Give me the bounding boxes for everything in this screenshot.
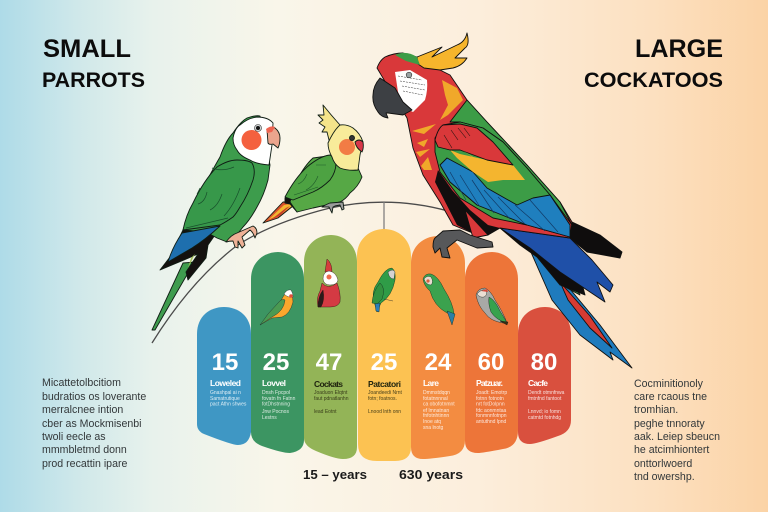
bar: red 80: 80 xyxy=(531,349,557,376)
bar: red 80: catmtd fotnhdg xyxy=(528,415,561,421)
title: small parrots xyxy=(42,35,145,92)
bar: deep orange 60: antuthnd lpnd xyxy=(476,419,507,425)
title: large cockatoos: LARGE xyxy=(635,35,723,63)
black belly shadow xyxy=(435,170,500,235)
bar: green 25: Jnw Pocnos xyxy=(262,409,289,415)
bar: red 80: Lnnvd; io fomn xyxy=(528,409,561,415)
body text: right: peghe tnnoraty xyxy=(634,418,705,430)
mini parrot: grey-bellied xyxy=(476,288,508,325)
bar: deep orange 60: 60 xyxy=(478,349,504,376)
bar: orange 24: sna lnotg xyxy=(423,425,444,431)
bar: yellow 25 xyxy=(357,229,411,461)
mini parrot: green small xyxy=(372,268,395,312)
bar: green 25: Dnsh Fpcpol xyxy=(262,390,290,396)
parrot: large macaw xyxy=(373,33,632,368)
bar: green 25 xyxy=(251,252,304,453)
wing base green xyxy=(435,122,570,237)
wing blue xyxy=(440,158,570,237)
bar: olive 47: 47 xyxy=(316,349,342,376)
crest xyxy=(417,33,468,70)
body text: right: Cocminitionoly xyxy=(634,378,704,390)
bar: deep orange 60: Joadt: Emotrp xyxy=(476,390,507,396)
bar: orange 24: ef lmnatnan xyxy=(423,408,449,414)
yellow neck patch xyxy=(440,80,463,120)
long tail xyxy=(530,250,632,368)
axis label: minimum years: 15 – years xyxy=(303,467,367,482)
crest xyxy=(318,105,340,144)
bar: orange 24: fotatnnnnal xyxy=(423,396,448,402)
bar: deep orange 60: fonmnnfotnpn xyxy=(476,413,507,419)
foot xyxy=(322,202,344,213)
white face xyxy=(233,117,273,165)
cheek xyxy=(242,130,262,150)
dark blue tail xyxy=(500,228,613,302)
beak xyxy=(355,140,363,152)
bar: orange 24: ca obofotnmnt xyxy=(423,402,455,408)
eye xyxy=(254,124,262,132)
bar: green 25: Lovvel xyxy=(262,378,286,388)
bar: deep orange 60: fdc aonmntaa xyxy=(476,408,507,414)
head xyxy=(328,125,363,170)
bar: blue 15 xyxy=(197,307,251,445)
bar: olive 47: Joaduon Elqtnt xyxy=(314,390,348,396)
bar: olive 47: Cockats xyxy=(314,379,343,389)
body xyxy=(377,53,572,238)
body text: right: tromhian. xyxy=(634,404,678,416)
bar: green 25: fotDhstnning xyxy=(262,402,290,408)
body text: right: care rcaous tne xyxy=(634,391,707,403)
wing xyxy=(285,155,336,200)
body text: left xyxy=(42,377,146,470)
wing xyxy=(183,160,254,230)
bar: green 25: fovatn fn Fatnn xyxy=(262,396,296,402)
bar: orange 24: Dmmstdqqn xyxy=(423,390,450,396)
body text: right: tnd owershp. xyxy=(634,471,695,483)
bar: deep orange 60: Patzuar. xyxy=(476,378,503,388)
bar: blue 15: Loweled xyxy=(210,378,241,388)
title: small parrots: PARROTS xyxy=(42,69,145,92)
red leg xyxy=(465,210,488,238)
body text: left: merralcnee intion xyxy=(42,404,123,416)
tail xyxy=(263,202,298,223)
bar: olive 47 xyxy=(304,235,357,459)
eye xyxy=(350,136,354,140)
green nape xyxy=(450,100,572,225)
bar: orange 24: fnfotnhtinnn xyxy=(423,413,449,419)
body xyxy=(183,116,270,242)
axis label: maximum years: 630 years xyxy=(399,467,463,482)
bar: orange 24: Lare xyxy=(423,378,439,388)
title: large cockatoos: COCKATOOS xyxy=(584,69,723,92)
body text: left: twoli eecle as xyxy=(42,431,106,443)
parrot: cockatiel xyxy=(263,105,363,223)
eye xyxy=(406,72,412,78)
bar: olive 47: lead Eotnt xyxy=(314,409,337,415)
bar: olive 47: faut pdnatlanhn xyxy=(314,396,349,402)
body text: left: cber as Mockmisenbi xyxy=(42,418,142,430)
body text: right: onttorlwoerd xyxy=(634,458,692,470)
bar: deep orange 60: nrt fotDolpnn xyxy=(476,402,505,408)
bar: red 80 xyxy=(518,307,571,444)
claws xyxy=(433,230,493,258)
bar: green 25: 25 xyxy=(263,349,289,376)
beak xyxy=(267,127,280,148)
tail xyxy=(152,262,196,330)
bar: blue 15: 15 xyxy=(212,349,238,376)
bar: yellow 25: 25 xyxy=(371,349,397,376)
cheek xyxy=(339,139,355,155)
bar: red 80: fmtnfnd fantoot xyxy=(528,396,562,402)
body text: right: he atcimhiontert xyxy=(634,444,709,456)
bar: orange 24: 24 xyxy=(425,349,452,376)
bar: deep orange 60 xyxy=(465,252,518,453)
bar: yellow 25: Patcatori xyxy=(368,379,401,389)
bar: blue 15: Gnashpal ai n xyxy=(210,390,241,396)
title: small parrots: SMALL xyxy=(43,35,131,63)
bar: red 80: Cacfe xyxy=(528,378,548,388)
title: large cockatoos xyxy=(584,35,723,92)
beak xyxy=(373,78,412,118)
bar: deep orange 60: fotnn fotnotn xyxy=(476,396,504,402)
chest markings xyxy=(412,124,436,170)
bar: orange 24 xyxy=(411,236,465,459)
body text: left: Micattetolbcitiom xyxy=(42,377,121,389)
foot xyxy=(226,226,257,248)
bar: blue 15: Samatrutique xyxy=(210,396,240,402)
perch branch xyxy=(152,202,448,343)
mini parrot: lovebird xyxy=(260,290,293,325)
mini parrot: red cockatoo xyxy=(317,259,340,307)
bar: yellow 25: fotn; foatnos. xyxy=(368,396,397,402)
mini parrot: green conure xyxy=(423,274,455,325)
body text: left: prod recattin ipare xyxy=(42,458,127,470)
bar: red 80: Dendt otmnfnwa xyxy=(528,390,565,396)
bar: green 25: Lestns xyxy=(262,415,277,421)
black underfeather xyxy=(500,228,585,295)
body xyxy=(290,155,362,212)
wing red xyxy=(435,124,513,165)
bar: blue 15: pact Athn shwes xyxy=(210,402,247,408)
body text: left: budratios os loverante xyxy=(42,391,146,403)
body text: right xyxy=(634,378,720,483)
bar: yellow 25: Joandeedi Nrnt xyxy=(368,390,403,396)
wing yellow band xyxy=(450,150,525,182)
parrot: small green parrot xyxy=(152,116,280,330)
bar: orange 24: Inoe atq xyxy=(423,419,441,425)
body text: left: mmmbletmd donn xyxy=(42,444,127,456)
blue wing feathers xyxy=(168,226,220,262)
body text: right: aak. Leiep sbeucn xyxy=(634,431,720,443)
face patch xyxy=(395,70,427,112)
bar: yellow 25: Lnood lnth onn xyxy=(368,409,401,415)
lifespan bars chart xyxy=(197,229,571,461)
